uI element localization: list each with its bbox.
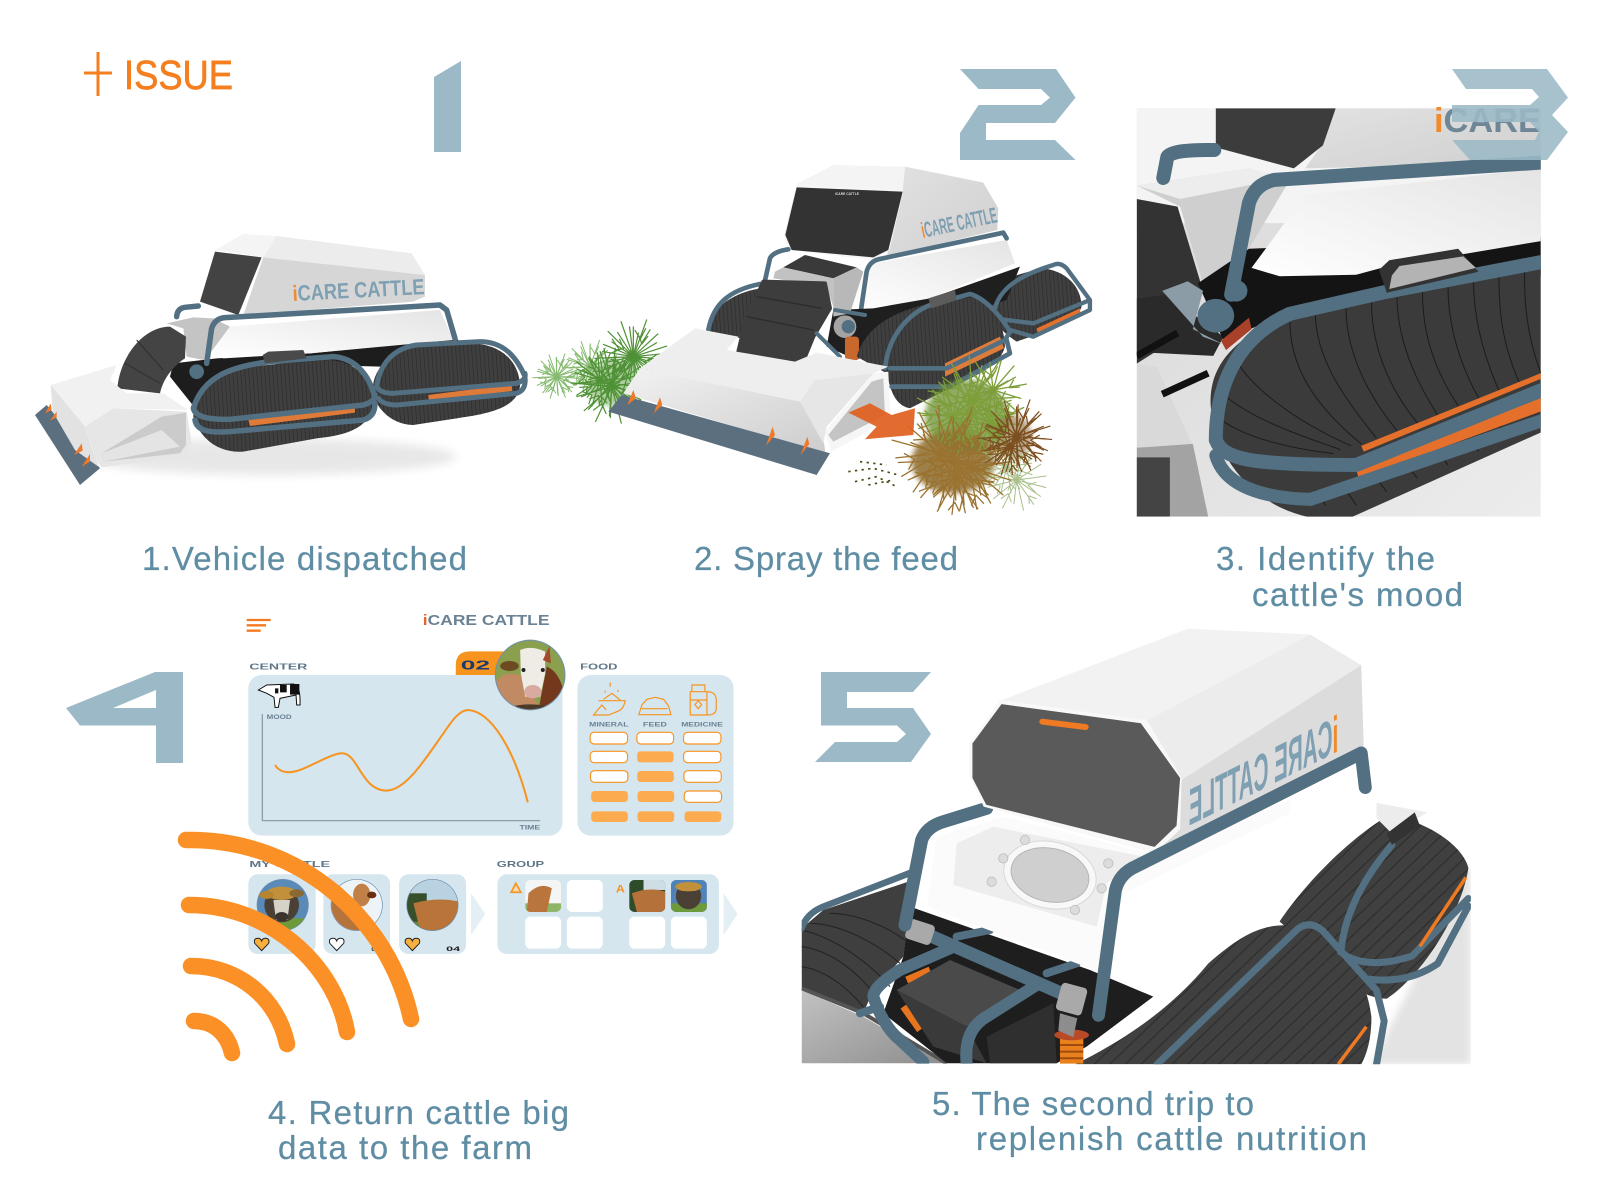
left spring: [903, 970, 930, 1030]
step 3 close-up panel: [1137, 102, 1541, 517]
next arrow: [471, 893, 485, 935]
section labels: CENTER: [249, 661, 309, 671]
tyre ribs: [1212, 271, 1541, 505]
front wheel: [857, 297, 1005, 408]
rear body piece: [1377, 803, 1428, 833]
under chassis: [883, 907, 1153, 1063]
step 5 caption: [932, 1085, 1367, 1157]
blade: [35, 405, 100, 485]
feeder: [51, 365, 192, 467]
app title: iCARE CATTLE: [423, 613, 549, 629]
console: [783, 255, 857, 278]
upper frame: [177, 305, 455, 363]
step number 1: [434, 61, 461, 152]
food icons: [594, 683, 716, 715]
front wheel frame: [193, 357, 375, 432]
step number 5: [815, 672, 931, 762]
menu icon: [247, 620, 271, 631]
wifi signal arcs: [186, 840, 411, 1053]
rear wheel orange strip: [428, 384, 512, 401]
vehicle logo: iCARE CATTLE: [292, 274, 425, 306]
step 5 caption: replenish cattle nutrition: [976, 1120, 1367, 1157]
front wheel orange strip: [945, 337, 1004, 377]
hinge and spring: [817, 310, 865, 360]
step 4 caption: 4. Return cattle big: [268, 1094, 569, 1131]
panel: my cattle cards: 04: [371, 946, 379, 953]
cargo body: [848, 240, 1015, 308]
section labels: GROUP: [497, 859, 544, 869]
front wheel orange strip: [248, 406, 355, 426]
axes: [262, 714, 540, 821]
panel: food: [578, 675, 734, 836]
feed duct: [738, 282, 830, 361]
step 1 vehicle: [35, 234, 525, 485]
cab: [1216, 108, 1541, 168]
panel: food: FEED: [643, 722, 667, 729]
cattle portrait 2: [330, 878, 383, 932]
dark chassis: [170, 338, 463, 410]
dark underside: [1198, 237, 1541, 341]
card counts: 04: [446, 946, 461, 953]
time label: TIME: [519, 824, 540, 831]
step 4 caption: [268, 1094, 569, 1166]
step 2 vehicle with grass: [532, 165, 1090, 530]
section labels: MY CATTLE: [249, 859, 330, 869]
group photo 1: [525, 880, 561, 912]
back wheel frame: [995, 264, 1090, 337]
orange tips: [627, 390, 809, 455]
panel 3 logo: iCARE: [1434, 102, 1541, 140]
left lower feeder: [1136, 365, 1192, 448]
panel: group: [497, 874, 738, 954]
step 3 caption: 3. Identify the: [1216, 540, 1435, 577]
right wheel frames: [1157, 925, 1384, 1064]
main frame: [1098, 753, 1365, 1015]
orange strips: [1338, 877, 1466, 1064]
feed duct: [117, 327, 186, 393]
left frame post: [905, 808, 987, 925]
white cargo body: [1252, 168, 1541, 276]
grey floor: [802, 990, 943, 1063]
cab: [200, 234, 425, 315]
hinge: [1162, 280, 1252, 350]
left rail: [802, 872, 913, 928]
tyre frame: [1216, 262, 1541, 465]
front wheel frame: [885, 294, 1010, 387]
hinge: [189, 364, 204, 379]
upper frame: [1163, 150, 1541, 295]
hearts: [254, 938, 420, 951]
panel: mood center: 02: [461, 657, 490, 672]
rear cross bars: [860, 930, 1077, 1013]
cow icon: [258, 684, 300, 707]
step number 2: [960, 69, 1076, 160]
back wheel strip: [1037, 308, 1081, 335]
group marks: [511, 883, 521, 892]
grey block: [167, 317, 230, 360]
cargo body: [953, 826, 1142, 965]
cargo body: [212, 310, 453, 358]
cattle portrait 1: [257, 878, 310, 932]
battery box: [897, 960, 1057, 1063]
heading: plus ISSUE: ISSUE: [124, 52, 233, 98]
hinges: [904, 918, 1088, 1016]
group photo 2: [629, 880, 665, 912]
ground shadow: [83, 438, 457, 475]
lower chassis and body: [802, 803, 1154, 1064]
group photo 3: [671, 880, 707, 912]
left chassis: [1137, 199, 1203, 364]
cab, rails and outer wheels: [969, 629, 1468, 1064]
cattle portrait 3: [406, 878, 460, 932]
vehicle logo: iCARE CATTLE: [919, 202, 999, 243]
food labels: MINERAL: [589, 722, 629, 729]
spray arrow: [848, 403, 915, 439]
dashboard app screen: [247, 613, 738, 954]
sub-frame loops: [873, 948, 1037, 1063]
step 3 caption: [1216, 540, 1463, 613]
mood curve: [275, 710, 528, 802]
screen logo: iCARE CATTLE: [835, 191, 859, 196]
step number 4: [66, 672, 183, 763]
step 3 caption: cattle's mood: [1252, 576, 1463, 613]
panel floor: [1137, 223, 1540, 516]
heading: plus ISSUE: [84, 52, 233, 98]
rear wheel: [373, 343, 520, 425]
right grass: [879, 346, 1056, 530]
tyre: [1211, 266, 1541, 517]
cab, rails and outer wheels: iCARE CATTLE: [1189, 705, 1338, 837]
section labels: FOOD: [580, 661, 618, 671]
cow portrait: [493, 638, 567, 712]
filler hole: [987, 833, 1113, 917]
cab: [784, 165, 998, 260]
rear wheel frame: [377, 342, 525, 405]
step 5 vehicle close-up: [802, 629, 1471, 1068]
rear sensor: [1387, 812, 1420, 845]
grass debris: [848, 462, 898, 487]
left wheel: [802, 880, 913, 1013]
step 2 caption: 2. Spray the feed: [694, 540, 958, 577]
panel: food: MEDICINE: [681, 722, 723, 729]
left grass: [532, 320, 668, 428]
panel: group: A: [616, 883, 625, 895]
dark underside: [827, 267, 1020, 360]
sensor: [928, 290, 957, 308]
front wheel: [193, 360, 373, 452]
spring: [1054, 1013, 1089, 1068]
cables: [1137, 333, 1208, 394]
next arrow: [724, 893, 738, 935]
step 5 caption: 5. The second trip to: [932, 1085, 1254, 1122]
left wheel: [707, 288, 760, 340]
orange strips: [1361, 373, 1541, 452]
sensor: [1379, 249, 1479, 293]
orange tips: [45, 403, 90, 467]
mood label: MOOD: [267, 714, 292, 721]
upper frame: [764, 233, 1007, 317]
panel: my cattle cards: [248, 874, 485, 954]
rear and front right wheels: [1076, 816, 1471, 1064]
rear wheel: [980, 268, 1082, 342]
step 4 caption: data to the farm: [278, 1129, 532, 1166]
level grid: [590, 732, 722, 822]
step number 3: [1452, 69, 1568, 160]
blade: [608, 395, 830, 475]
panel: mood center: [248, 638, 567, 836]
feeder: [623, 328, 891, 453]
cross bar: [930, 930, 1062, 999]
tab 02: [456, 651, 507, 675]
step 1 caption: 1.Vehicle dispatched: [142, 540, 467, 577]
section labels: [249, 661, 618, 869]
cab: [969, 629, 1364, 853]
sensor: [263, 350, 307, 363]
